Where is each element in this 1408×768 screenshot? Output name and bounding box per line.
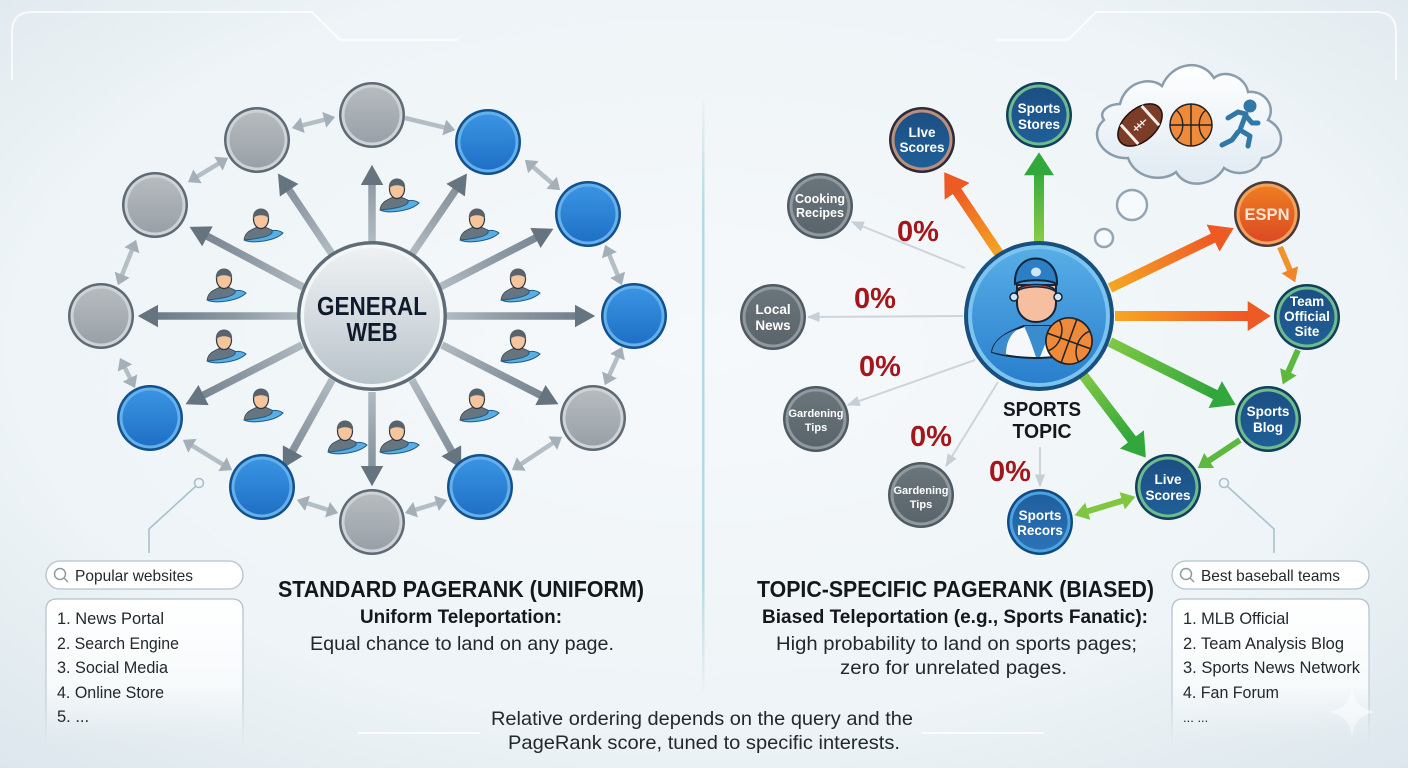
page node: ESPN: ESPN: [1244, 205, 1290, 224]
zero percent labels: 0%: [859, 351, 901, 383]
page node: Local News: News: [755, 318, 791, 333]
page node: Team Official Site: [1274, 284, 1340, 350]
icon: basketball: [1170, 104, 1212, 146]
page node: Sports Stores: Stores: [1018, 117, 1060, 132]
page node: Gardening Tips lower: Tips: [910, 499, 932, 511]
page node: Sports Blog: Sports: [1247, 404, 1289, 419]
page node: Live Scores top: Scores: [899, 140, 945, 155]
heading and description: biased: TOPIC-SPECIFIC PAGERANK (BIASED): [757, 576, 1154, 602]
ears: [1010, 293, 1018, 301]
links between outer nodes: [122, 118, 618, 510]
connector: right search: [1220, 478, 1274, 553]
icon: football: [1110, 96, 1170, 154]
results list: standard: 4. Online Store: [57, 684, 164, 702]
page node: Team Official Site: Site: [1295, 324, 1320, 339]
footer note: Relative ordering depends on the query and the: [491, 708, 913, 730]
heading and description: biased: High probability to land on sports pages;: [776, 633, 1137, 655]
search box: Best baseball teams: Best baseball teams: [1201, 568, 1340, 585]
results list: standard: 2. Search Engine: [57, 635, 179, 653]
results list: standard: 5. ...: [57, 708, 89, 726]
thin zero-probability arrows: [808, 222, 1040, 486]
page node: Live Scores lower: [1135, 454, 1201, 520]
page node: Gardening Tips lower: Gardening: [893, 485, 949, 497]
page node: Cooking Recipes: [787, 173, 853, 239]
page node: Live Scores top: LIve: [908, 125, 936, 140]
page node: Live Scores top: [889, 107, 955, 173]
label: Sports Topic: TOPIC: [1012, 421, 1072, 443]
panel: topic-specific PageRank network: [740, 65, 1340, 555]
General Web hub: [297, 241, 447, 391]
page node: Sports Recors: [1007, 489, 1073, 555]
label: Sports Topic: [1003, 399, 1081, 443]
heading and description: biased: zero for unrelated pages.: [840, 657, 1067, 679]
zero percent labels: 0%: [910, 421, 952, 453]
page node: Sports Stores: Sports: [1018, 101, 1060, 116]
page node: Cooking Recipes: Cooking: [795, 192, 845, 206]
page node: Gardening Tips: Tips: [805, 422, 827, 434]
footer note: PageRank score, tuned to specific interests.: [508, 732, 900, 754]
search box: Popular websites: Popular websites: [75, 568, 193, 585]
thought cloud with sports icons: [1095, 65, 1281, 247]
results list: biased: 1. MLB Official: [1183, 610, 1289, 628]
results list: standard: [46, 599, 243, 745]
page node: ESPN: [1234, 181, 1300, 247]
footer note: [491, 708, 913, 754]
heading and description: standard: [278, 576, 644, 655]
page node: Sports Blog: [1235, 386, 1301, 452]
connector: left search: [149, 478, 204, 553]
General Web hub: GENERAL: [317, 291, 427, 321]
zero percent labels: [854, 216, 1031, 488]
page node: Gardening Tips: [783, 386, 849, 452]
divider between panels: [702, 95, 704, 695]
sparkle mark: [1328, 688, 1376, 736]
page node: Live Scores lower: Live: [1154, 472, 1182, 487]
search box: Popular websites: [46, 561, 243, 589]
page node: Local News: Local: [755, 302, 791, 317]
heading and description: biased: [757, 576, 1154, 679]
heading and description: biased: Biased Teleportation (e.g., Sports Fanatic):: [762, 607, 1148, 628]
heading and description: standard: STANDARD PAGERANK (UNIFORM): [278, 576, 644, 602]
user icons: [207, 178, 540, 454]
page node: Local News: [740, 284, 806, 350]
radial arrows from General Web: [156, 183, 577, 468]
page node: Team Official Site: Official: [1284, 309, 1330, 324]
cap: [1015, 258, 1057, 284]
page node: Gardening Tips: Gardening: [788, 408, 844, 420]
page node: Sports Recors: Recors: [1017, 523, 1063, 538]
results list: biased: ... ...: [1183, 710, 1208, 725]
basketball: [1039, 311, 1099, 371]
icon: runner: [1222, 102, 1258, 146]
links between topic pages: [1086, 247, 1298, 512]
panel: standard PageRank network: [68, 82, 667, 555]
page node: Sports Recors: Sports: [1019, 508, 1061, 523]
results list: biased: 3. Sports News Network: [1183, 659, 1361, 677]
page node: Gardening Tips lower: [888, 462, 954, 528]
face: [1017, 285, 1056, 322]
heading and description: standard: Uniform Teleportation:: [360, 607, 562, 628]
results list: biased: [1172, 599, 1369, 745]
zero percent labels: 0%: [897, 216, 939, 248]
results list: standard: 1. News Portal: [57, 610, 164, 628]
hub: sports fan: [964, 241, 1114, 391]
General Web hub: WEB: [346, 317, 398, 347]
heading and description: standard: Equal chance to land on any page.: [310, 633, 614, 655]
page node: Live Scores lower: Scores: [1145, 488, 1191, 503]
outer nodes: [68, 82, 667, 555]
label: Sports Topic: SPORTS: [1003, 399, 1081, 421]
zero percent labels: 0%: [989, 456, 1031, 488]
page node: Sports Stores: [1006, 82, 1072, 148]
search box: Best baseball teams: [1172, 561, 1369, 589]
page node: Cooking Recipes: Recipes: [796, 206, 844, 220]
jersey: [992, 326, 1072, 358]
high-probability arrows: [956, 173, 1250, 441]
page node: Sports Blog: Blog: [1253, 420, 1283, 435]
results list: standard: 3. Social Media: [57, 659, 169, 677]
results list: biased: 2. Team Analysis Blog: [1183, 635, 1344, 653]
zero percent labels: 0%: [854, 283, 896, 315]
page node: Team Official Site: Team: [1290, 294, 1324, 309]
results list: biased: 4. Fan Forum: [1183, 684, 1279, 702]
